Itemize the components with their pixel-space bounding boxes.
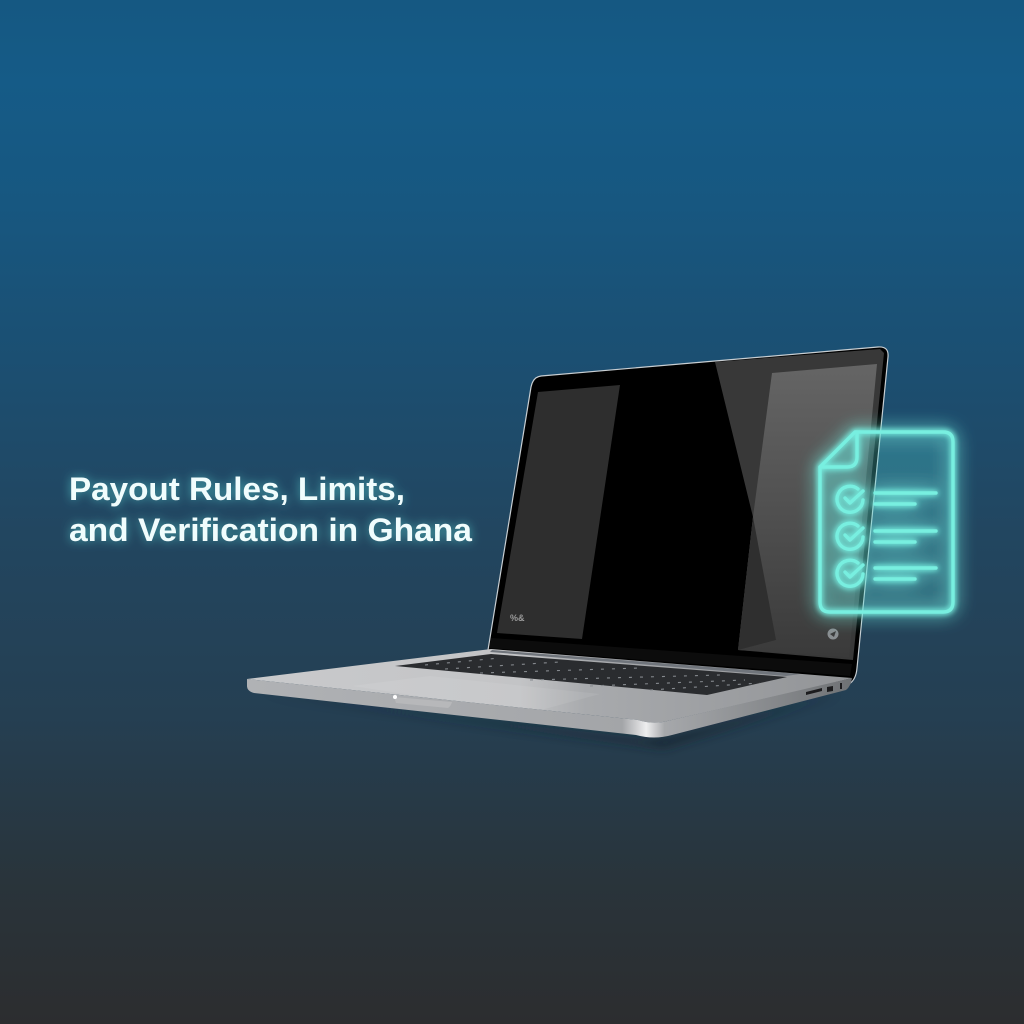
front edge — [247, 678, 852, 738]
title: and Verification in Ghana — [69, 512, 473, 548]
checklist item 3 — [837, 560, 936, 586]
laptop lid — [488, 347, 888, 684]
screen left reflection — [497, 385, 620, 639]
document outline — [820, 432, 953, 612]
icon: neon document checklist — [820, 432, 953, 612]
checklist item 1 — [837, 486, 936, 512]
screen right reflection — [715, 349, 884, 660]
checklist item 2 — [837, 523, 936, 549]
screen badge — [828, 628, 838, 640]
notch — [393, 695, 452, 708]
title: Payout Rules, Limits, — [69, 471, 405, 507]
laptop hinge highlight — [490, 650, 800, 676]
screen logo left: %& — [510, 613, 525, 623]
laptop — [247, 347, 888, 748]
laptop shadow — [258, 693, 840, 748]
laptop base deck — [247, 649, 852, 723]
lower bezel — [489, 638, 852, 676]
title — [69, 471, 473, 548]
keyboard — [395, 654, 787, 695]
trackpad — [352, 676, 600, 713]
side ports — [806, 683, 842, 695]
folded corner — [820, 433, 857, 467]
